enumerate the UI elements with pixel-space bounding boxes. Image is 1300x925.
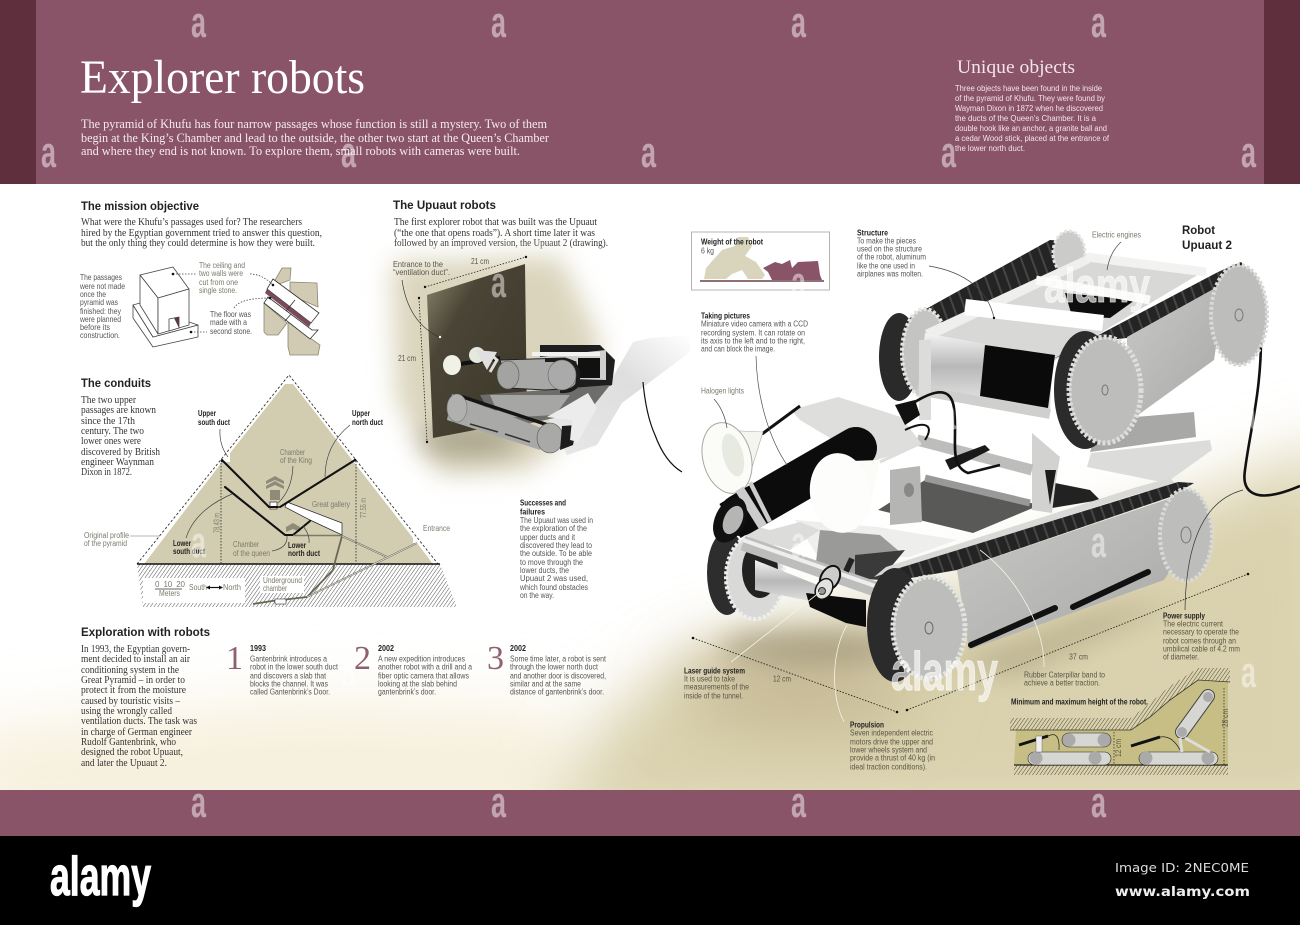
callout: structure: Structure xyxy=(857,228,888,238)
sand ground background xyxy=(0,440,1300,830)
callout: power supply: of diameter. xyxy=(1163,652,1199,662)
label: lower south duct xyxy=(173,494,232,556)
panel: unique objects xyxy=(955,57,1110,153)
label: minimum and maximum height: Minimum and maximum height of the robot. xyxy=(1011,698,1148,706)
scale and orientation: 0 10 20 xyxy=(155,580,186,589)
watermark: repeating letter a: a xyxy=(491,778,506,827)
black credit footer xyxy=(0,836,1300,925)
dimension: width 21 cm xyxy=(424,256,527,288)
watermark: repeating letter a: a xyxy=(1241,128,1256,177)
power cable xyxy=(1244,330,1300,495)
label: weight of the robot: Weight of the robot xyxy=(701,238,763,246)
label: entrance: Entrance xyxy=(423,524,450,533)
watermark: alamy upper: alamy xyxy=(1044,260,1150,313)
bottom maroon band xyxy=(0,790,1300,836)
callout: power supply xyxy=(1163,490,1243,662)
text: exploration body xyxy=(81,644,197,769)
watermark: repeating letter a: a xyxy=(41,128,56,177)
text: mission objective body: What were the Khufu’s passages used for? The researchers xyxy=(81,217,302,228)
timeline step 2: another robot with a drill and a xyxy=(378,662,472,672)
heading: robot upuaut 2: Robot xyxy=(1182,223,1215,237)
text: mission objective body: but the only thing they could determine is how they were built. xyxy=(81,238,315,249)
rear base wheel and front cross tube xyxy=(707,522,905,627)
label: underground chamber: chamber xyxy=(263,584,287,593)
timeline step 2: looking at the slab behind xyxy=(378,680,457,688)
timeline step 2: fiber optic camera that allows xyxy=(378,672,469,680)
central supports xyxy=(795,412,1212,557)
callout: floor stone: The floor was xyxy=(210,310,251,319)
footer text: website: www.alamy.com xyxy=(1115,885,1250,900)
panel: robot weight xyxy=(692,232,830,290)
text: unique objects body: of the pyramid of Khufu. They were found by xyxy=(955,94,1105,103)
dimension: 12 cm xyxy=(1114,732,1123,765)
upper arm rear track xyxy=(879,231,1090,401)
base near track xyxy=(867,478,1212,682)
text: passages side note: were not made xyxy=(79,282,125,291)
camera support plate xyxy=(791,392,1000,473)
text: exploration body: protect it from the moisture xyxy=(81,685,186,696)
text: conduits body xyxy=(81,395,161,478)
callout: propulsion: provide a thrust of 40 kg (in xyxy=(850,754,935,762)
callout: power supply: robot comes through an xyxy=(1163,636,1236,646)
text: unique objects body: Wayman Dixon in 1872 when he discovered xyxy=(955,104,1103,113)
callout: taking pictures: its axis to the left and to the right, xyxy=(701,336,805,346)
label: height 77.55 m: 77.55 m xyxy=(359,498,368,518)
watermark: alamy lower: alamy xyxy=(891,640,998,702)
timeline step 3: distance of gantenbrink’s door. xyxy=(510,688,604,696)
callout: taking pictures: Miniature video camera with a CCD xyxy=(701,320,808,328)
footer logo: alamy: alamy xyxy=(50,845,151,907)
watermark: repeating letter a: a xyxy=(1091,778,1106,827)
label: original profile: Original profile xyxy=(84,531,129,540)
heading: unique objects: Unique objects xyxy=(957,57,1075,78)
scale and orientation xyxy=(143,578,245,603)
label: entrance to ventilation duct: Entrance to the xyxy=(393,260,444,269)
text: exploration body: ment decided to install an air xyxy=(81,654,190,665)
laser unit xyxy=(816,562,844,594)
callout: laser guide system: inside of the tunnel. xyxy=(684,692,743,700)
dimension: 37 cm xyxy=(906,573,1249,711)
small robot lower track xyxy=(447,394,577,453)
watermark: repeating letter a: a xyxy=(1091,518,1106,567)
dimension: width 21 cm: 21 cm xyxy=(471,257,489,266)
text: unique objects body: a cedar Wood stick, placed at the entrance of xyxy=(955,134,1110,143)
text: exploration body: using the wrongly called xyxy=(81,706,173,717)
robot at maximum height xyxy=(1131,692,1218,765)
callout: electric engines xyxy=(1092,230,1141,270)
text: mission objective body xyxy=(81,217,322,249)
text: successes and failures: Successes and xyxy=(520,498,566,508)
timeline step 1: 1993 xyxy=(250,644,266,653)
text: exploration body: caused by touristic visits – xyxy=(81,696,181,707)
callout: ceiling and walls: The ceiling and xyxy=(199,261,245,270)
text: passages side note xyxy=(79,273,125,340)
label: original profile: of the pyramid xyxy=(84,539,127,548)
text: conduits body: since the 17th xyxy=(81,416,136,427)
heading: robot upuaut 2: Upuaut 2 xyxy=(1182,238,1232,252)
upper arm interior tubes xyxy=(917,255,1206,420)
heading: the upuaut robots: The Upuaut robots xyxy=(393,198,496,212)
label: chamber of the queen: of the queen xyxy=(233,549,270,558)
callout: rubber caterpillar band xyxy=(980,550,1105,688)
scale and orientation: South xyxy=(189,583,207,592)
text: conduits body: lower ones were xyxy=(81,436,141,447)
dimension: 12 cm xyxy=(692,637,898,713)
callout: floor stone: made with a xyxy=(210,318,247,327)
text: passages side note: before its xyxy=(80,323,110,332)
illustration: upuaut robot in duct entrance xyxy=(392,256,690,475)
text: upuaut body xyxy=(394,217,608,249)
text: conduits body: discovered by British xyxy=(81,447,161,458)
diagram: minimum and maximum height of the robot xyxy=(1010,668,1230,775)
callout: taking pictures xyxy=(701,312,808,465)
callout: rubber caterpillar band: Rubber Caterpillar band to xyxy=(1024,670,1105,680)
label: upper south duct: south duct xyxy=(198,418,230,427)
intro text: The pyramid of Khufu has four narrow passages whose function is still a mystery. Two of them xyxy=(81,117,547,131)
upper arm front track xyxy=(1051,262,1267,449)
text: conduits body: Dixon in 1872. xyxy=(81,467,132,478)
callout: structure: To make the pieces xyxy=(857,236,916,246)
text: successes and failures: lower ducts, the xyxy=(520,566,569,575)
timeline step 2: 2 xyxy=(354,640,371,677)
dimension: 37 cm: 37 cm xyxy=(1069,652,1088,662)
text: exploration body: Great Pyramid – in order to xyxy=(81,675,185,686)
intro text: begin at the King’s Chamber and lead to the outside, the other two start at the Queen’s Chamber xyxy=(81,131,550,145)
callout: propulsion: Seven independent electric xyxy=(850,728,933,738)
text: conduits body: The two upper xyxy=(81,395,136,406)
callout: taking pictures: Taking pictures xyxy=(701,312,750,320)
callout: halogen lights: Halogen lights xyxy=(701,386,744,396)
callout: laser guide system: It is used to take xyxy=(684,674,735,684)
timeline step 3: 2002 xyxy=(510,644,526,653)
timeline step 1: and discovers a slab that xyxy=(250,672,327,680)
text: passages side note: were planned xyxy=(79,315,121,324)
icon: robot silhouette xyxy=(763,260,822,280)
label: underground chamber: Underground xyxy=(263,576,302,585)
halogen lamp left xyxy=(695,406,800,499)
text: mission objective body: hired by the Egyptian government tried to answer this question, xyxy=(81,228,322,239)
text: successes and failures: The Upuaut was used in xyxy=(520,516,593,525)
timeline step 2: gantenbrink’s door. xyxy=(378,688,436,696)
chart: pyramid cross section xyxy=(84,375,457,607)
text: passages side note: The passages xyxy=(80,273,122,282)
callout: power supply: necessary to operate the xyxy=(1163,628,1239,636)
camera cylinder xyxy=(706,448,856,548)
label: upper south duct xyxy=(198,409,230,457)
callout: structure: used on the structure xyxy=(857,244,922,254)
text: successes and failures: the exploration of the xyxy=(520,524,587,533)
callout: laser guide system: Laser guide system xyxy=(684,666,745,676)
timeline step 1: robot in the lower south duct xyxy=(250,662,339,672)
label: chamber of the king: of the King xyxy=(280,456,312,465)
callout: ceiling and walls: two walls were xyxy=(199,269,243,278)
label: upper north duct xyxy=(325,409,383,477)
watermark: repeating letter a: a xyxy=(941,128,956,177)
text: exploration body: ventilation ducts. The task was xyxy=(81,716,197,727)
text: successes and failures xyxy=(519,498,593,600)
diagram: stone cross section xyxy=(264,268,320,355)
watermark: repeating letter a: a xyxy=(791,258,806,307)
label: great gallery: Great gallery xyxy=(312,500,350,509)
heading: the conduits: The conduits xyxy=(81,376,151,390)
text: passages side note: pyramid was xyxy=(80,298,118,307)
label: underground chamber xyxy=(260,576,304,593)
dimension: 12 cm: 12 cm xyxy=(773,674,791,684)
callout: power supply: Power supply xyxy=(1163,612,1205,620)
callout: laser guide system: measurements of the xyxy=(684,682,749,692)
timeline step 1 xyxy=(226,640,339,696)
text: successes and failures: Upuaut 2 was used, xyxy=(520,574,588,583)
hatched duct walls xyxy=(1010,668,1230,775)
text: passages side note: once the xyxy=(80,290,106,299)
scale and orientation: North xyxy=(223,583,241,592)
callout: propulsion xyxy=(835,625,935,772)
watermark: repeating letter a: a xyxy=(491,258,506,307)
watermark: repeating letter a: a xyxy=(191,778,206,827)
value: 6 kg: 6 kg xyxy=(701,246,714,256)
dimension: 28 cm xyxy=(1221,688,1230,765)
callout: ceiling and walls: cut from one xyxy=(199,278,238,287)
callout: taking pictures: recording system. It can rotate on xyxy=(701,328,805,338)
callout: structure: of the robot, aluminum xyxy=(857,252,926,262)
callout: propulsion: Propulsion xyxy=(850,720,884,730)
watermark: repeating letter a: a xyxy=(191,518,206,567)
text: passages side note: finished: they xyxy=(80,307,121,316)
text: conduits body: century. The two xyxy=(81,426,144,437)
callout: electric engines: Electric engines xyxy=(1092,230,1141,240)
small robot upper track xyxy=(497,358,578,391)
watermark: repeating letter a: a xyxy=(641,128,656,177)
scale and orientation: Meters xyxy=(159,589,180,598)
watermark: repeating letter a: a xyxy=(341,128,356,177)
label: lower north duct: north duct xyxy=(288,549,320,558)
text: upuaut body: The first explorer robot that was built was the Upuaut xyxy=(394,217,597,228)
label: entrance to ventilation duct: “ventilation duct”. xyxy=(393,268,450,277)
dimension: 12 cm: 12 cm xyxy=(1114,739,1123,757)
text: exploration body: in charge of German engineer xyxy=(81,727,192,738)
label: entrance to ventilation duct xyxy=(393,260,450,338)
text: unique objects body: Three objects have been found in the inside xyxy=(955,84,1103,93)
text: upuaut body: (“the one that opens roads”). A short time later it was xyxy=(394,228,595,239)
text: successes and failures: upper ducts and it xyxy=(520,533,576,542)
intro text: and where they end is not known. To explore them, small robots with cameras were built. xyxy=(81,144,520,158)
text: successes and failures: which found obstacles xyxy=(519,583,588,592)
label: lower south duct: south duct xyxy=(173,547,205,556)
text: exploration body: and later the Upuaut 2. xyxy=(81,758,167,769)
callout: power supply: The electric current xyxy=(1163,620,1224,628)
watermark: repeating letter a: a xyxy=(41,648,56,697)
callout: floor stone: second stone. xyxy=(210,327,252,336)
callout: rubber caterpillar band: achieve a better traction. xyxy=(1024,678,1100,688)
hand xyxy=(547,335,690,455)
panel: exploration with robots xyxy=(81,625,607,769)
label: lower south duct: Lower xyxy=(173,539,191,548)
panel: the mission objective xyxy=(79,199,322,355)
footer text: image id: Image ID: 2NEC0ME xyxy=(1115,860,1249,875)
heading: the mission objective: The mission objective xyxy=(81,199,199,213)
text: unique objects body xyxy=(955,84,1110,153)
timeline step 1: Gantenbrink introduces a xyxy=(250,654,327,664)
label: upper north duct: Upper xyxy=(352,409,370,418)
small robot rear track xyxy=(480,345,615,430)
dimension: height 21 cm xyxy=(398,297,428,443)
callout: propulsion: lower wheels system and xyxy=(850,746,927,754)
text: successes and failures: discovered they lead to xyxy=(520,541,592,550)
small robot lamps xyxy=(443,347,500,375)
timeline step 1: blocks the channel. It was xyxy=(250,680,328,688)
text: unique objects body: the lower north duct. xyxy=(955,144,1025,153)
text: exploration body: designed the robot Upuaut, xyxy=(81,747,183,758)
timeline step 3: similar and at the same xyxy=(510,680,581,688)
timeline step 1: 1 xyxy=(226,640,243,677)
callout: ceiling and walls: single stone. xyxy=(199,286,237,295)
icon: crawling baby silhouette xyxy=(704,237,765,279)
panel: the upuaut robots xyxy=(392,198,690,600)
diagram: stone block xyxy=(133,267,198,347)
text: unique objects body: double hook like an anchor, a granite ball and xyxy=(955,124,1107,133)
text: conduits body: passages are known xyxy=(81,405,157,416)
watermark: repeating letter a: a xyxy=(1241,648,1256,697)
hand fingers xyxy=(547,393,597,442)
text: successes and failures: failures xyxy=(520,508,545,516)
watermark: repeating letter a: a xyxy=(1241,390,1256,439)
callout: structure: like the one used in xyxy=(857,262,915,270)
callout: halogen lights xyxy=(701,386,744,428)
text: upuaut body: followed by an improved version, the Upuaut 2 (drawing). xyxy=(394,238,608,249)
text: exploration body: In 1993, the Egyptian govern- xyxy=(81,644,190,655)
robot at minimum height xyxy=(1019,733,1111,765)
text: successes and failures: the outside. To be able xyxy=(520,549,592,558)
timeline step 2: 2002 xyxy=(378,644,394,653)
label: upper south duct: Upper xyxy=(198,409,216,418)
timeline step 3: 3 xyxy=(487,640,504,677)
text: successes and failures: on the way. xyxy=(520,591,554,600)
label: chamber of the king xyxy=(278,448,312,503)
label: lower north duct xyxy=(288,526,320,558)
timeline step 1: called Gantenbrink’s Door. xyxy=(250,688,330,696)
callout: propulsion: ideal traction conditions). xyxy=(850,762,927,772)
callout: laser guide system xyxy=(684,592,820,700)
text: unique objects body: the ducts of the Queen’s Chamber. It is a xyxy=(955,114,1097,123)
text: passages side note: construction. xyxy=(80,331,120,340)
callout: ceiling and walls xyxy=(172,261,274,295)
watermark: repeating letter a: a xyxy=(791,518,806,567)
heading: robot upuaut 2 xyxy=(1182,223,1232,252)
label: upper north duct: north duct xyxy=(352,418,383,427)
panel: the conduits xyxy=(81,375,457,607)
label: lower north duct: Lower xyxy=(288,541,306,550)
text: exploration body: conditioning system in the xyxy=(81,665,179,676)
dimension: height 21 cm: 21 cm xyxy=(398,354,416,363)
callout: taking pictures: and can block the image. xyxy=(701,344,775,354)
title: Explorer robots xyxy=(80,51,365,104)
label: chamber of the king: Chamber xyxy=(280,448,305,457)
timeline step 3: through the lower north duct xyxy=(510,662,599,672)
timeline step 3 xyxy=(487,640,607,696)
callout: power supply: umbilical cable of 4.2 mm xyxy=(1163,644,1240,654)
dimension: 28 cm: 28 cm xyxy=(1221,709,1230,727)
timeline step 3: and another door is discovered, xyxy=(510,672,606,680)
timeline step 2: A new expedition introduces xyxy=(378,654,465,664)
timeline step 3: Some time later, a robot is sent xyxy=(510,654,607,664)
halogen lamp right xyxy=(805,443,921,537)
callout: propulsion: motors drive the upper and xyxy=(850,738,933,746)
text: conduits body: engineer Waynman xyxy=(81,457,155,468)
heading: exploration with robots: Exploration with robots xyxy=(81,625,210,639)
text: exploration body: Rudolf Gantenbrink, who xyxy=(81,737,176,748)
callout: structure xyxy=(857,228,995,319)
callout: structure: airplanes was molten. xyxy=(857,270,923,278)
timeline step 2 xyxy=(354,640,472,696)
label: height 78.43 m: 78.43 m xyxy=(212,513,222,533)
illustration: Upuaut 2 robot xyxy=(695,231,1300,682)
callout: floor stone xyxy=(190,297,271,336)
watermark: repeating letter a: a xyxy=(941,390,956,439)
watermark: repeating letter a: a xyxy=(341,648,356,697)
intro text xyxy=(81,117,550,158)
top title band xyxy=(0,0,1300,184)
label: original profile xyxy=(84,531,160,548)
text: successes and failures: to move through the xyxy=(520,558,583,567)
label: chamber of the queen xyxy=(233,536,287,558)
watermark: repeating letter a: a xyxy=(791,778,806,827)
label: chamber of the queen: Chamber xyxy=(233,540,259,549)
